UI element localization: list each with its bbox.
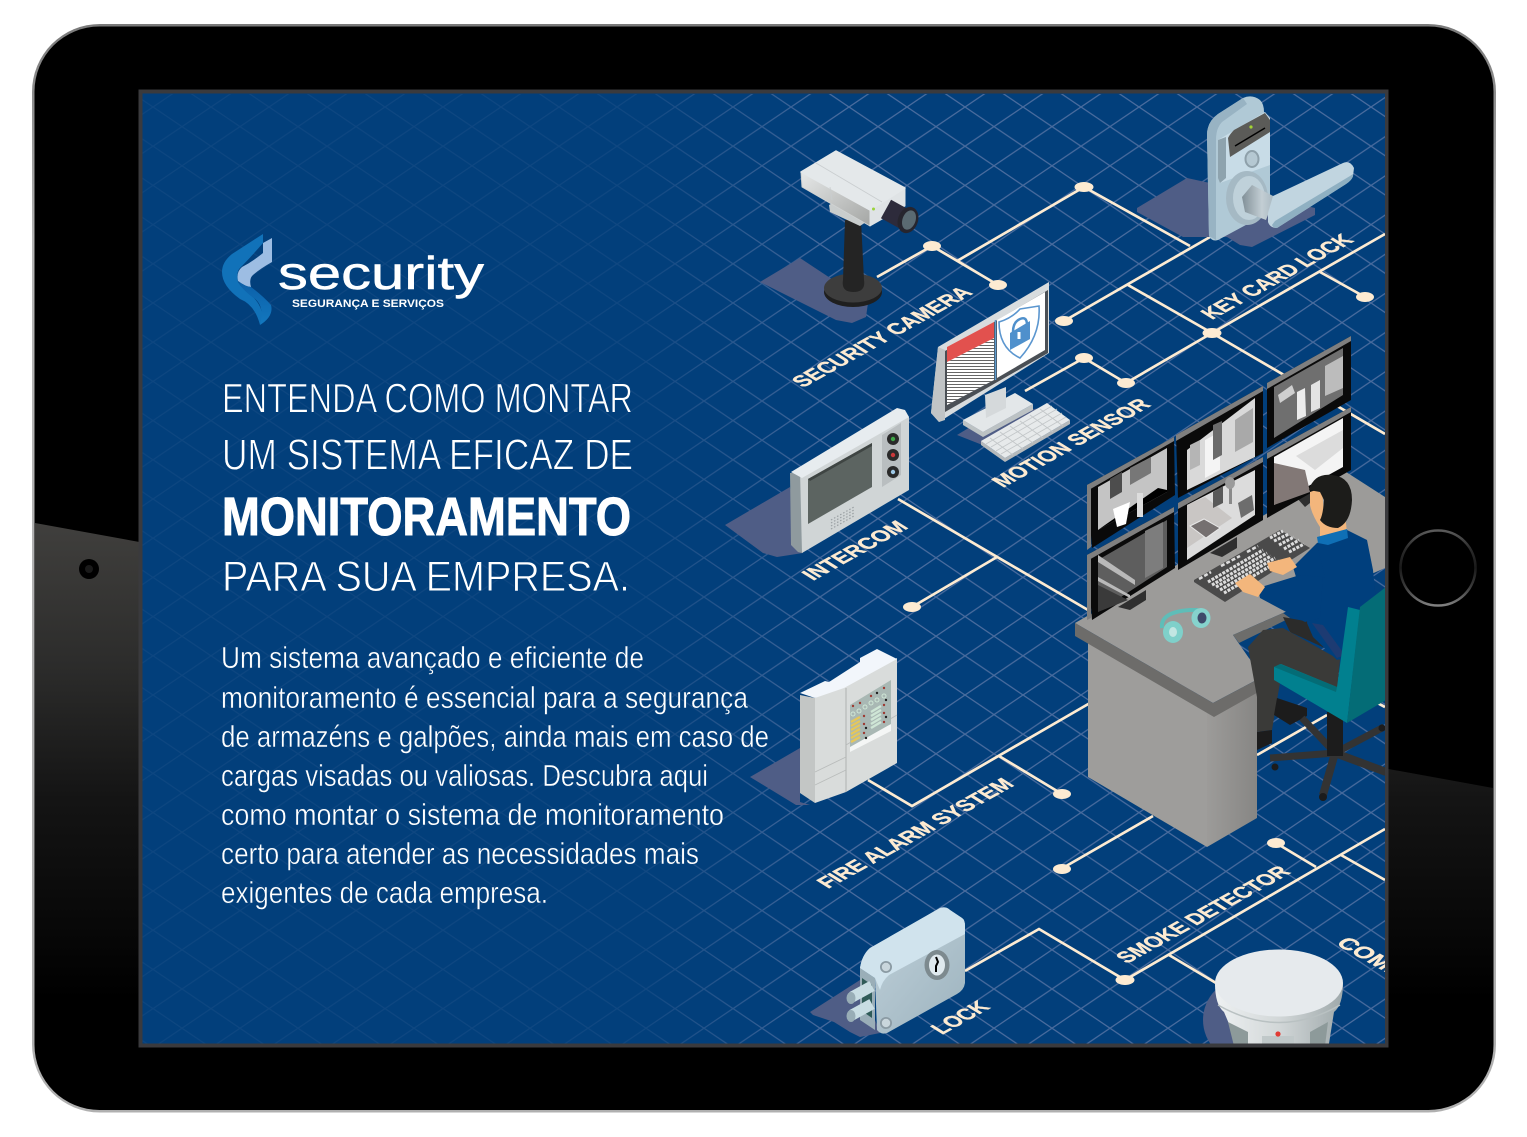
icon: lock <box>810 907 965 1037</box>
tablet glass reflection <box>35 523 1493 1000</box>
headline: ENTENDA COMO MONTAR <box>222 374 633 422</box>
camera feed 1 <box>1098 448 1167 530</box>
label: fire alarm system: FIRE ALARM SYSTEM <box>811 775 1019 892</box>
neck and collar <box>1320 522 1347 536</box>
camera feed 4 <box>1098 520 1167 612</box>
hands <box>1235 574 1265 597</box>
label: lock: LOCK <box>925 997 995 1038</box>
logo <box>222 234 484 325</box>
body paragraph: Um sistema avançado e eficiente de <box>221 640 644 675</box>
logo tagline: SEGURANÇA E SERVIÇOS <box>292 298 444 310</box>
connection nodes <box>903 182 1374 985</box>
body paragraph: de armazéns e galpões, ainda mais em caso de <box>221 719 769 754</box>
icon: fire alarm panel <box>750 649 897 805</box>
body paragraph: monitoramento é essencial para a segurança <box>221 680 749 715</box>
office chair <box>1270 587 1386 801</box>
camera feed 2 <box>1187 398 1255 490</box>
front camera <box>79 559 99 579</box>
body paragraph: exigentes de cada empresa. <box>221 875 548 910</box>
screen bezel <box>138 90 1388 1048</box>
headline: PARA SUA EMPRESA. <box>222 553 630 601</box>
logo wordmark: security <box>278 247 484 299</box>
arms <box>1294 543 1317 576</box>
torso <box>1307 530 1378 660</box>
headline: UM SISTEMA EFICAZ DE <box>222 430 633 480</box>
operator <box>1235 475 1378 750</box>
face and hair <box>1310 490 1324 527</box>
body paragraph: certo para atender as necessidades mais <box>221 836 699 871</box>
label: motion sensor: MOTION SENSOR <box>986 395 1156 491</box>
background isometric grid <box>142 93 1386 1045</box>
label: security camera: SECURITY CAMERA <box>786 283 978 391</box>
icon: small keyboard <box>981 403 1070 462</box>
icon: security camera <box>760 151 922 323</box>
icon: key card lock <box>1137 96 1354 247</box>
camera feed 5 <box>1187 470 1255 560</box>
body paragraph: como montar o sistema de monitoramento <box>221 797 724 832</box>
label: smoke detector: SMOKE DETECTOR <box>1110 862 1296 967</box>
body paragraph: cargas visadas ou valiosas. Descubra aqui <box>221 758 708 793</box>
home button <box>1400 530 1476 606</box>
label: com (cropped): COMM <box>1331 933 1417 983</box>
camera feed 6 <box>1274 418 1343 505</box>
screen <box>142 93 1417 1062</box>
monitor stands <box>1118 494 1310 610</box>
headline <box>222 374 633 601</box>
icon: smoke detector <box>1203 950 1343 1044</box>
monitor wall <box>1087 336 1351 620</box>
headline: MONITORAMENTO <box>222 487 631 547</box>
logo symbol <box>222 234 272 325</box>
headphones <box>1162 608 1210 643</box>
shoes <box>1257 730 1272 750</box>
security desk <box>1075 470 1385 847</box>
label: intercom: INTERCOM <box>796 517 913 584</box>
legs <box>1248 628 1340 732</box>
body paragraph <box>221 640 769 910</box>
circuit wires <box>868 182 1385 985</box>
label: key card lock: KEY CARD LOCK <box>1195 230 1359 323</box>
monitor frames <box>1087 336 1351 620</box>
icon: desktop monitor with shield <box>931 282 1070 462</box>
keyboard on desk <box>1194 530 1310 602</box>
camera feed 3 <box>1274 348 1343 438</box>
icon: intercom <box>725 408 909 557</box>
